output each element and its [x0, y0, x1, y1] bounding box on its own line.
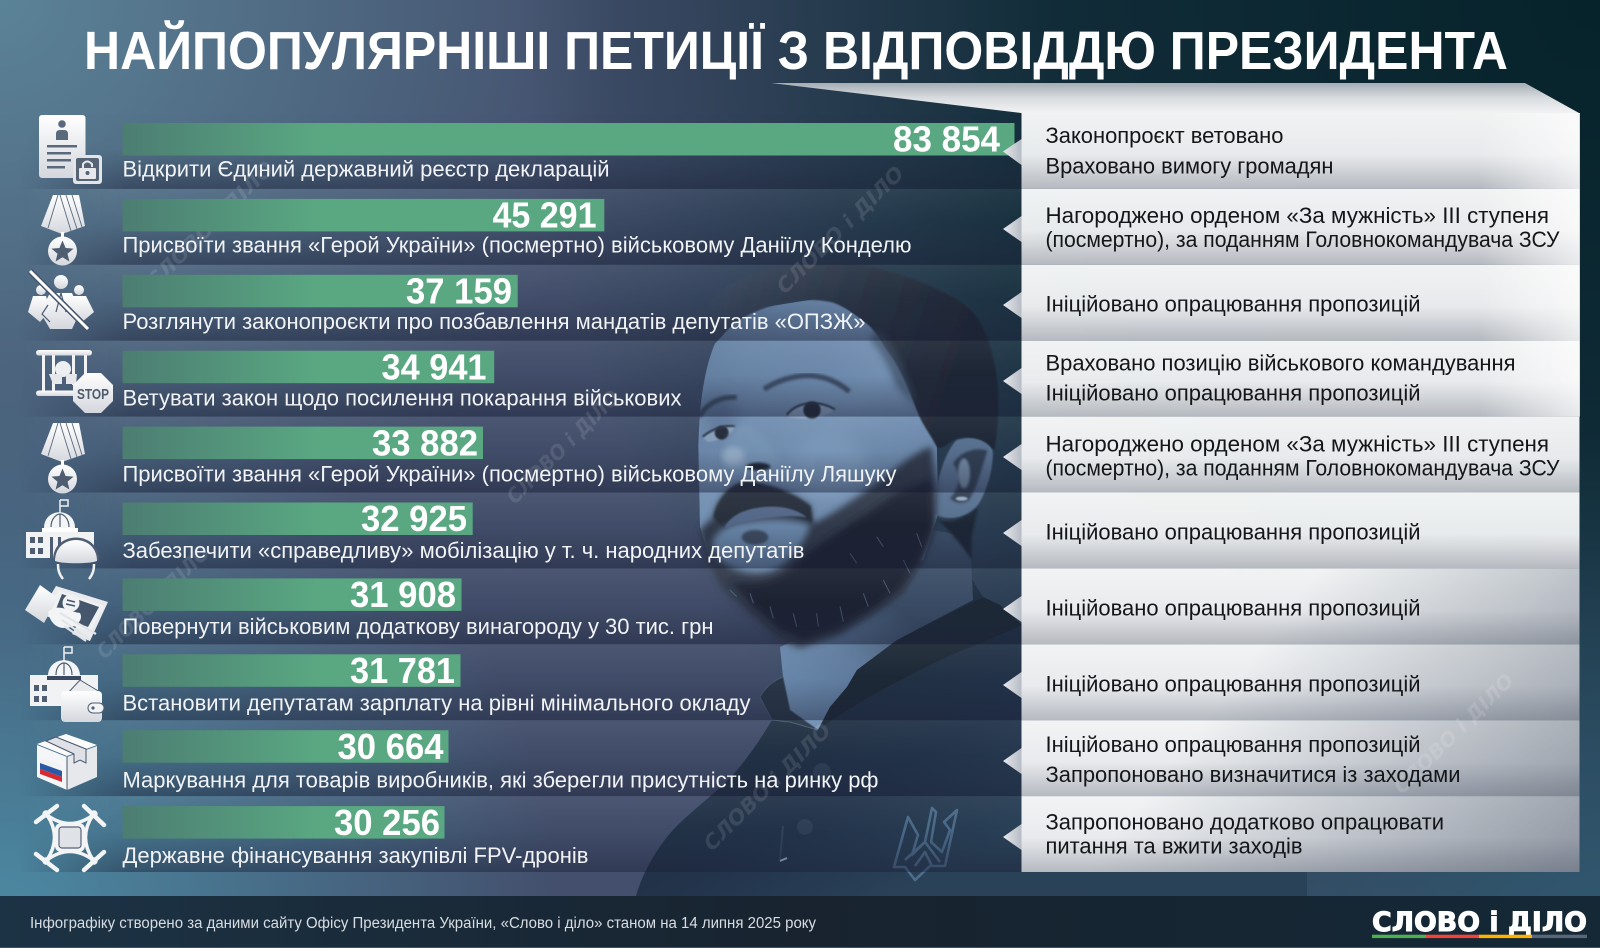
row 6 bar and label: Забезпечити «справедливу» мобілізацію у т. ч. народних депутатів [122, 538, 804, 563]
row 1 bar and label: Відкрити Єдиний державний реєстр декларацій [122, 157, 610, 182]
row 4 bar and label: 34 941 [382, 346, 486, 388]
row 7 bar and label [122, 574, 714, 639]
portrait of the president [636, 263, 1307, 896]
neck [780, 530, 973, 730]
face skin [698, 297, 938, 593]
icon: FPV drone [36, 806, 104, 870]
icon: prison bars with stop sign [36, 350, 113, 413]
bar chart of signatures [122, 118, 1014, 868]
beard hair texture [730, 533, 922, 627]
response texts: Запропоновано визначитися із заходами [1046, 762, 1460, 787]
panel: president responses [771, 83, 1580, 872]
row 9 bar and label: 30 664 [338, 726, 444, 767]
row 9 bar and label [122, 726, 878, 792]
icon: document with padlock [39, 115, 102, 184]
row 8 bar and label: 31 781 [350, 650, 455, 691]
watermarks: СЛОВО і ДІЛО [142, 156, 279, 294]
ear [933, 438, 993, 518]
icon: parliament building with wallet [30, 647, 104, 722]
response texts: питання та вжити заходів [1046, 834, 1302, 858]
row 8 bar and label: Встановити депутатам зарплату на рівні мінімального окладу [122, 691, 750, 716]
shadow behind ear [935, 507, 978, 560]
row 3 bar and label: Розглянути законопроєкти про позбавлення мандатів депутатів «ОПЗЖ» [122, 309, 866, 334]
source note: Інфографіку створено за даними сайту Офісу Президента України, «Слово і діло» станом на 14 липня 2025 року [30, 915, 816, 932]
row 5 bar and label: 33 882 [372, 422, 478, 464]
row 4 bar and label: Ветувати закон щодо посилення покарання військових [122, 386, 682, 410]
watermarks [92, 156, 909, 856]
icon: box with russian flag [37, 734, 97, 790]
row 5 bar and label [122, 422, 896, 487]
row 3 bar and label: 37 159 [406, 270, 512, 312]
response texts: Запропоновано додатково опрацювати [1046, 810, 1444, 834]
row 6 bar and label: 32 925 [361, 498, 467, 539]
watermarks: СЛОВО і ДІЛО [772, 161, 909, 299]
row 7 bar and label: 31 908 [350, 574, 456, 615]
watermarks: СЛОВО і ДІЛО [699, 718, 836, 856]
icon: crossed-out group of deputies [28, 271, 94, 329]
response texts: Ініційовано опрацювання пропозицій [1046, 672, 1420, 696]
icon: medal [41, 195, 85, 266]
row 7 bar and label: Повернути військовим додаткову винагороду у 30 тис. грн [122, 614, 714, 639]
response texts: Ініційовано опрацювання пропозицій [1046, 520, 1420, 544]
row 9 bar and label: Маркування для товарів виробників, які зберегли присутність на ринку рф [122, 767, 878, 792]
row bands [0, 113, 1022, 872]
row 2 bar and label: Присвоїти звання «Герой України» (посмертно) військовому Даніїлу Конделю [122, 233, 912, 258]
row 10 bar and label: Державне фінансування закупівлі FPV-дронів [122, 843, 588, 868]
response texts: Враховано вимогу громадян [1046, 154, 1334, 178]
response texts: Ініційовано опрацювання пропозицій [1046, 596, 1420, 620]
panel top roof [771, 83, 1579, 113]
row 8 bar and label [122, 650, 750, 716]
watermark on panel: СЛОВО і ДІЛО [1389, 668, 1519, 799]
shirt collar [818, 597, 1022, 730]
row 1 bar and label [122, 118, 1014, 182]
row 1 bar and label: 83 854 [893, 118, 1000, 160]
logo: СЛОВО і ДІЛО [1372, 907, 1587, 938]
eyes [787, 405, 834, 419]
row 5 bar and label: Присвоїти звання «Герой України» (посмертно) військовому Даніїлу Ляшуку [122, 462, 896, 487]
trident emblem on the shirt [894, 808, 957, 880]
watermarks: СЛОВО і ДІЛО [92, 540, 215, 664]
response row backgrounds [1022, 113, 1580, 872]
response texts: Нагороджено орденом «За мужність» III ступеня [1046, 431, 1549, 456]
lip and chin skin [712, 519, 810, 573]
icon: parliament building with helmet [26, 500, 99, 579]
row 2 bar and label: 45 291 [492, 194, 596, 236]
row 10 bar and label: 30 256 [334, 802, 440, 843]
hair [710, 263, 998, 451]
mustache [713, 482, 813, 530]
response texts [1046, 123, 1560, 858]
shirt buttons and placket [780, 763, 831, 861]
row 2 bar and label [122, 194, 912, 258]
pointer triangles [1003, 139, 1022, 850]
response texts: Враховано позицію військового командування [1046, 350, 1516, 376]
icon: prison bars with stop sign: STOP [77, 387, 109, 403]
row 10 bar and label [122, 802, 588, 868]
icon: hand holding money [25, 585, 108, 641]
response texts: (посмертно), за поданням Головнокомандувача ЗСУ [1046, 455, 1560, 480]
body and shoulders [636, 560, 1307, 896]
icon: medal [41, 423, 85, 494]
watermarks: СЛОВО і ДІЛО [502, 385, 625, 509]
response texts: Ініційовано опрацювання пропозицій [1046, 380, 1420, 406]
response texts: Нагороджено орденом «За мужність» III ступеня [1046, 203, 1549, 228]
beard [699, 447, 937, 648]
title: НАЙПОПУЛЯРНІШІ ПЕТИЦІЇ З ВІДПОВІДДЮ ПРЕЗИДЕНТА [84, 20, 1508, 81]
response texts: Законопроєкт ветовано [1046, 123, 1284, 148]
response texts: Ініційовано опрацювання пропозицій [1046, 292, 1420, 316]
response texts: (посмертно), за поданням Головнокомандувача ЗСУ [1046, 227, 1560, 252]
footer [0, 896, 1600, 948]
brows [764, 376, 849, 392]
head in crop coordinates [698, 263, 998, 648]
row 3 bar and label [122, 270, 866, 334]
row 6 bar and label [122, 498, 804, 563]
response texts: Ініційовано опрацювання пропозицій [1046, 732, 1420, 757]
nose [723, 423, 782, 474]
row 4 bar and label [122, 346, 682, 410]
